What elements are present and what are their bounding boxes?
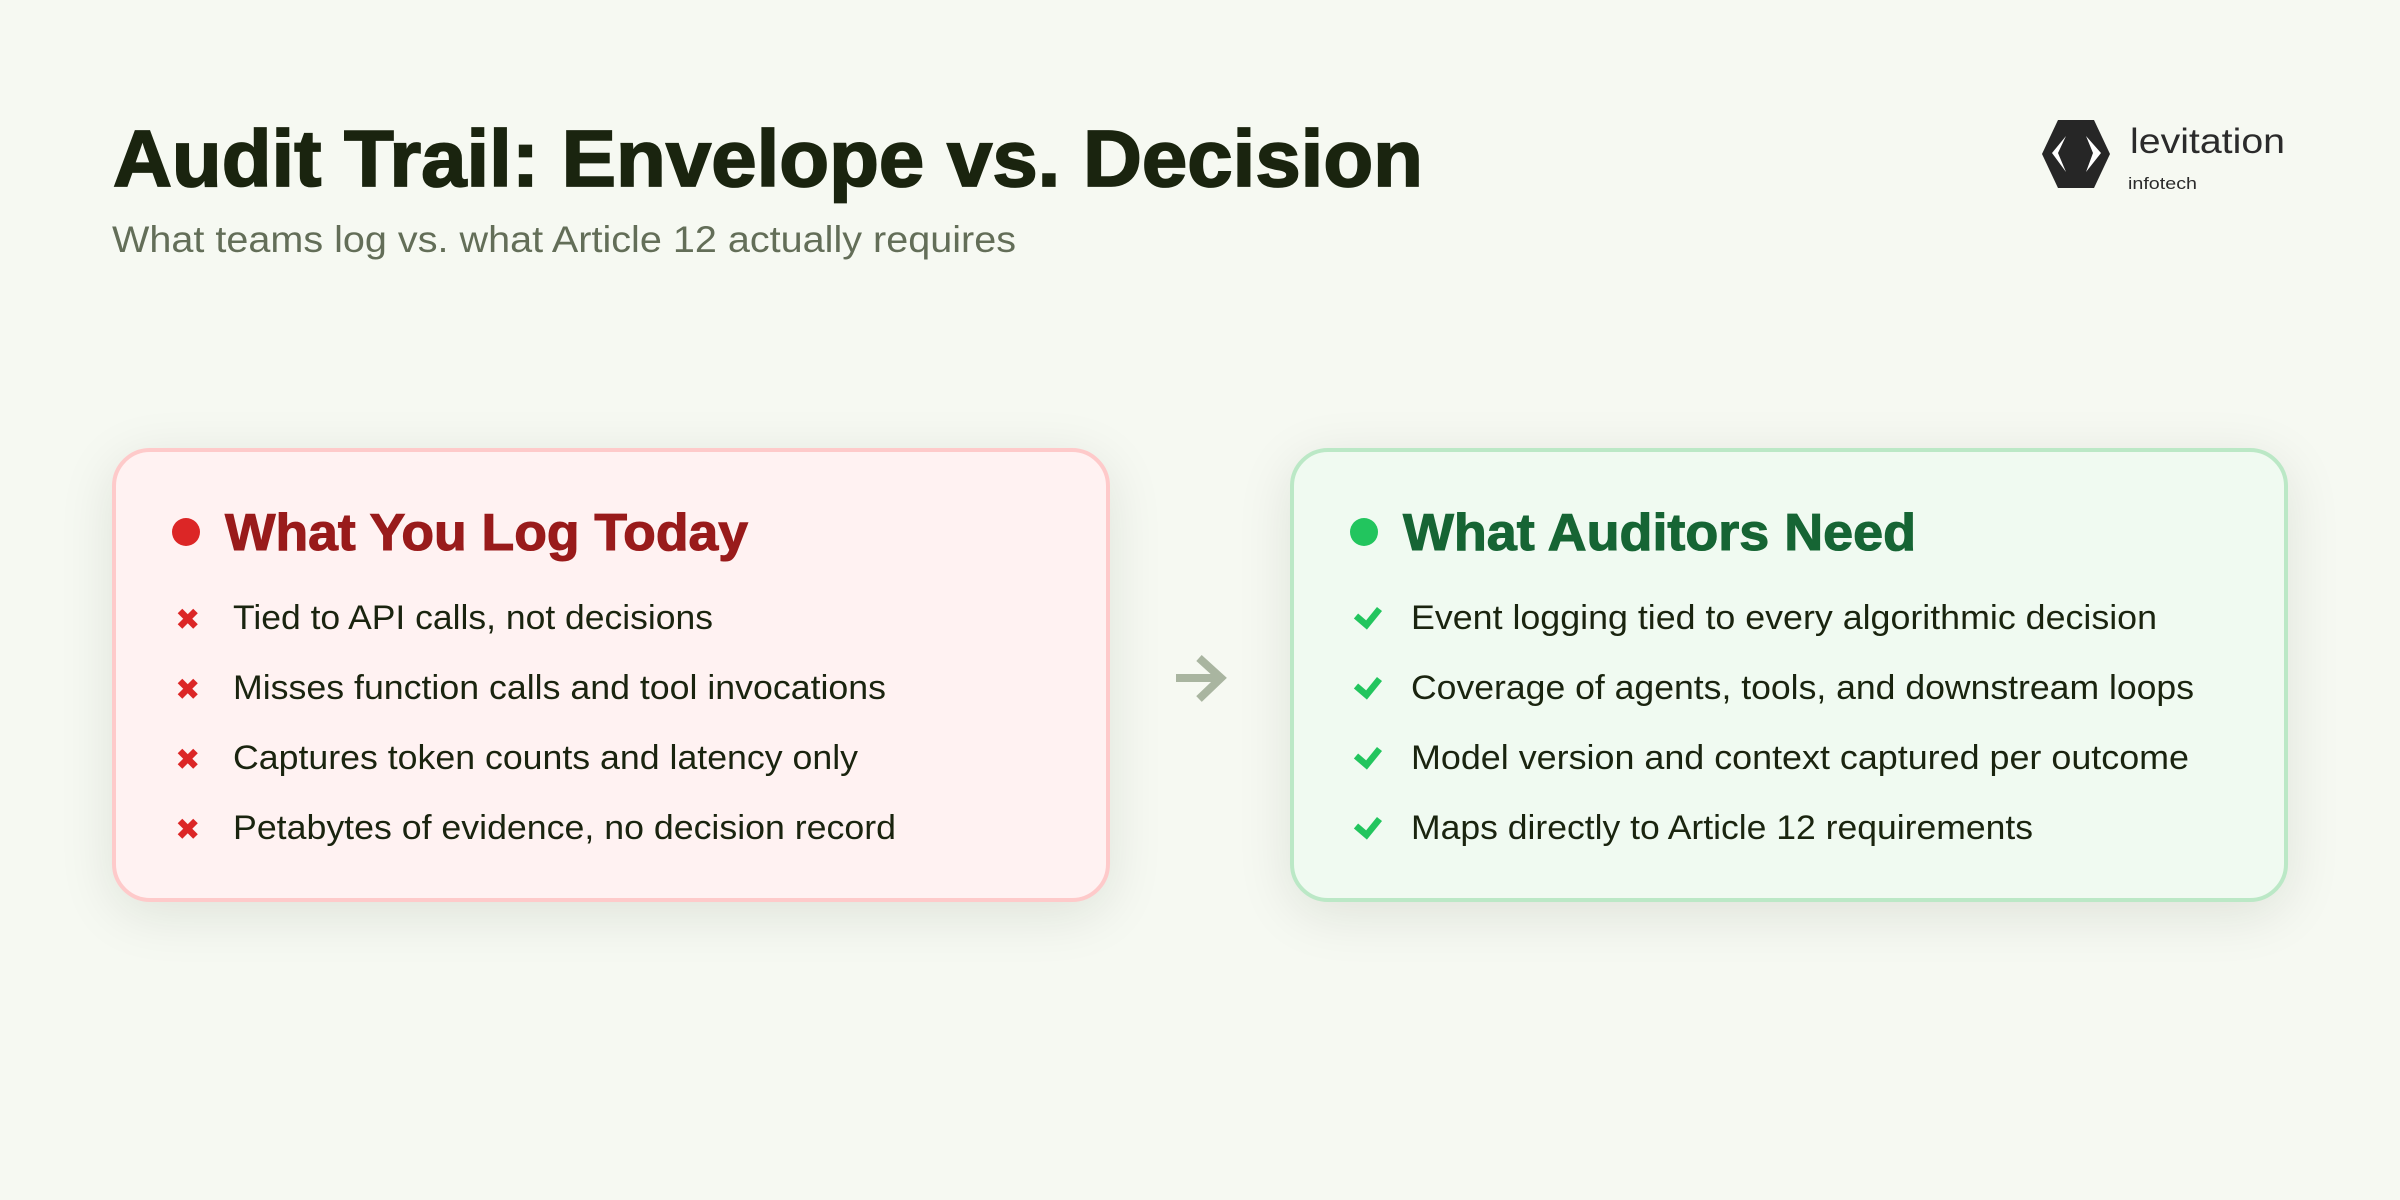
logo sub-wordmark: infotech xyxy=(2128,174,2197,193)
heading: what auditors need: What Auditors Need xyxy=(1403,504,1916,562)
icon: red status dot xyxy=(172,518,200,546)
heading: what you log today: What You Log Today xyxy=(225,504,748,562)
list item 3: Captures token counts and latency only xyxy=(233,739,858,777)
subtitle: What teams log vs. what Article 12 actually requires xyxy=(112,219,1016,260)
list item 3: Model version and context captured per outcome xyxy=(1411,739,2189,777)
icon: green status dot xyxy=(1350,518,1378,546)
title: Audit Trail: Envelope vs. Decision xyxy=(113,114,1423,203)
logo wordmark: levitation xyxy=(2130,122,2285,161)
list item 4: Maps directly to Article 12 requirements xyxy=(1411,809,2033,847)
panel content: what auditors need xyxy=(1350,504,2194,847)
panel: what auditors need background xyxy=(1290,448,2288,902)
panel content: what you log today xyxy=(172,504,896,847)
arrow: from logged to needed xyxy=(1176,658,1222,699)
logo xyxy=(2042,120,2285,193)
list item 1: Event logging tied to every algorithmic decision xyxy=(1411,599,2157,637)
icon: logo hexagon xyxy=(2042,120,2110,188)
list item 4: Petabytes of evidence, no decision record xyxy=(233,809,896,847)
list item 2: Misses function calls and tool invocations xyxy=(233,669,886,707)
list item 2: Coverage of agents, tools, and downstream loops xyxy=(1411,669,2194,707)
list item 1: Tied to API calls, not decisions xyxy=(233,599,713,637)
panel: what you log today background xyxy=(112,448,1110,902)
